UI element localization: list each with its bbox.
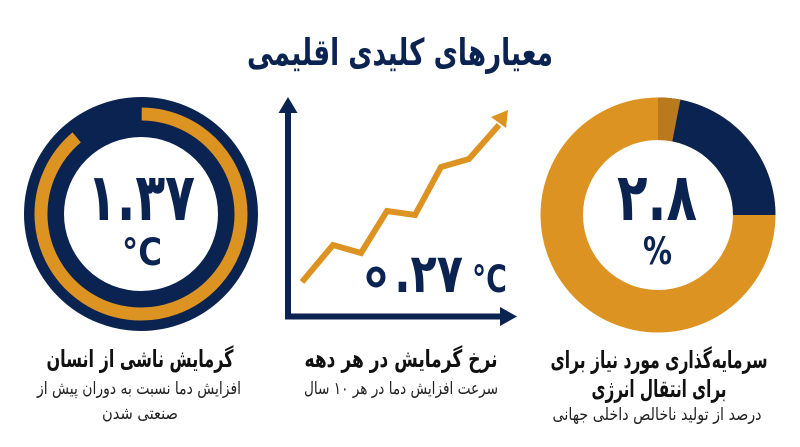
- description: سرعت افزایش دما در هر ۱۰ سال: [304, 379, 498, 399]
- heading: نرخ گرمایش در هر دهه: [304, 345, 498, 373]
- description: صنعتی شدن: [102, 404, 178, 424]
- unit °C: °C: [472, 258, 507, 301]
- panel: warming rate per decade: [278, 97, 517, 399]
- unit percent: %: [643, 230, 672, 273]
- description: [36, 379, 241, 424]
- trend line: [302, 110, 508, 282]
- value 0.27: ۰.۲۷: [368, 242, 463, 305]
- ring gauge: [41, 114, 241, 314]
- axes: [278, 97, 517, 326]
- donut chart: [562, 98, 776, 311]
- panel: energy transition investment: [550, 98, 776, 425]
- panel: human-caused warming: [36, 114, 241, 424]
- value 1.37: ۱.۳۷: [87, 159, 195, 236]
- value 2.8: ۲.۸: [617, 159, 697, 236]
- description: درصد از تولید ناخالص داخلی جهانی: [552, 405, 762, 425]
- heading: گرمایش ناشی از انسان: [46, 345, 234, 373]
- unit °C: °C: [122, 231, 162, 274]
- description: افزایش دما نسبت به دوران پیش از: [36, 379, 241, 399]
- title: معیارهای کلیدی اقلیمی: [247, 31, 553, 74]
- heading: [550, 346, 768, 403]
- heading: برای انتقال انرژی: [592, 375, 726, 403]
